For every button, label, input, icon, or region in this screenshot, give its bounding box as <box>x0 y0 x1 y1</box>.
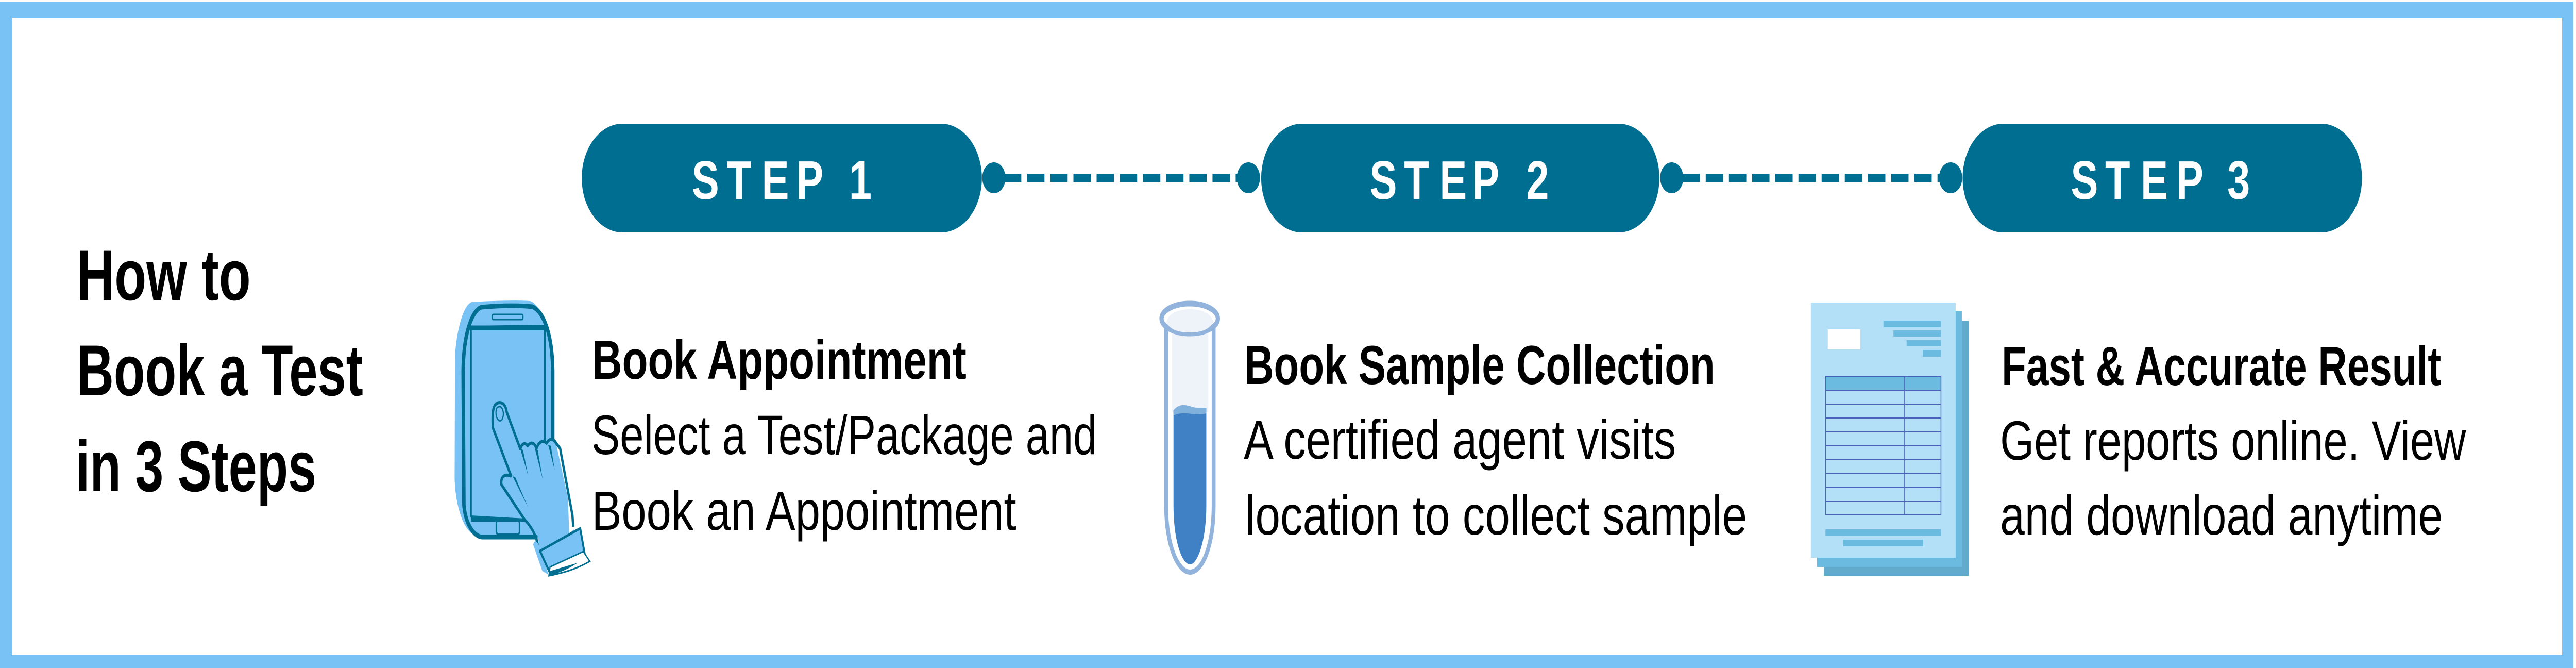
hand <box>493 403 575 554</box>
tube interior <box>1172 330 1208 412</box>
tube body <box>1166 322 1214 572</box>
phone speaker <box>492 314 523 320</box>
text: step 1: Book an Appointment <box>592 480 1016 542</box>
phone backing <box>454 300 552 536</box>
report table <box>1825 376 1941 515</box>
phone outline <box>463 306 553 537</box>
text: step 2: location to collect sample <box>1245 485 1747 547</box>
text: step 3: and download anytime <box>2000 485 2443 547</box>
icon: report pages <box>1811 303 1969 576</box>
step 2 pill <box>1261 124 1659 232</box>
title <box>76 235 363 507</box>
cuff <box>533 540 549 575</box>
connector: step 2 to step 3 <box>1660 162 1962 193</box>
text: step 2 <box>1244 335 1747 547</box>
report logo box <box>1828 329 1860 349</box>
connector: step 1 to step 2 <box>982 162 1260 193</box>
phone screen <box>471 327 545 517</box>
step 3 pill <box>1962 124 2362 232</box>
step 1 pill <box>582 124 982 232</box>
title: Book a Test <box>77 330 363 411</box>
report header lines <box>1884 321 1941 357</box>
text: step 1: Book Appointment <box>592 329 967 391</box>
fingernail <box>496 407 503 421</box>
text: step 2: A certified agent visits <box>1244 409 1676 471</box>
step 1 pill: STEP 1 <box>692 149 872 211</box>
icon: phone with tapping hand <box>454 300 590 576</box>
step 3 pill: STEP 3 <box>2071 149 2250 211</box>
tube rim <box>1161 304 1218 333</box>
phone home button <box>496 520 519 535</box>
text: step 2: Book Sample Collection <box>1244 335 1715 396</box>
icon: test tube <box>1161 304 1218 572</box>
title: How to <box>77 235 251 316</box>
finger creases <box>513 445 555 507</box>
text: step 3 <box>2000 336 2466 547</box>
liquid <box>1174 407 1206 564</box>
step 2 pill: STEP 2 <box>1370 149 1549 211</box>
text: step 3: Fast & Accurate Result <box>2002 336 2441 397</box>
title: in 3 Steps <box>76 426 316 507</box>
text: step 3: Get reports online. View <box>2000 410 2466 472</box>
text: step 1 <box>591 329 1097 542</box>
text: step 1: Select a Test/Package and <box>591 405 1097 466</box>
report footer lines <box>1825 529 1941 546</box>
